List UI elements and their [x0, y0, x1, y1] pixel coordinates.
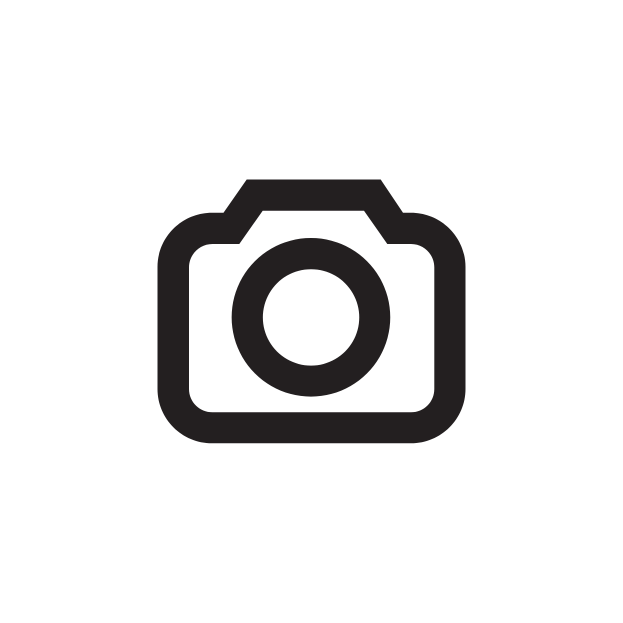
camera body outline: [158, 180, 466, 443]
camera lens ring: [232, 238, 390, 397]
